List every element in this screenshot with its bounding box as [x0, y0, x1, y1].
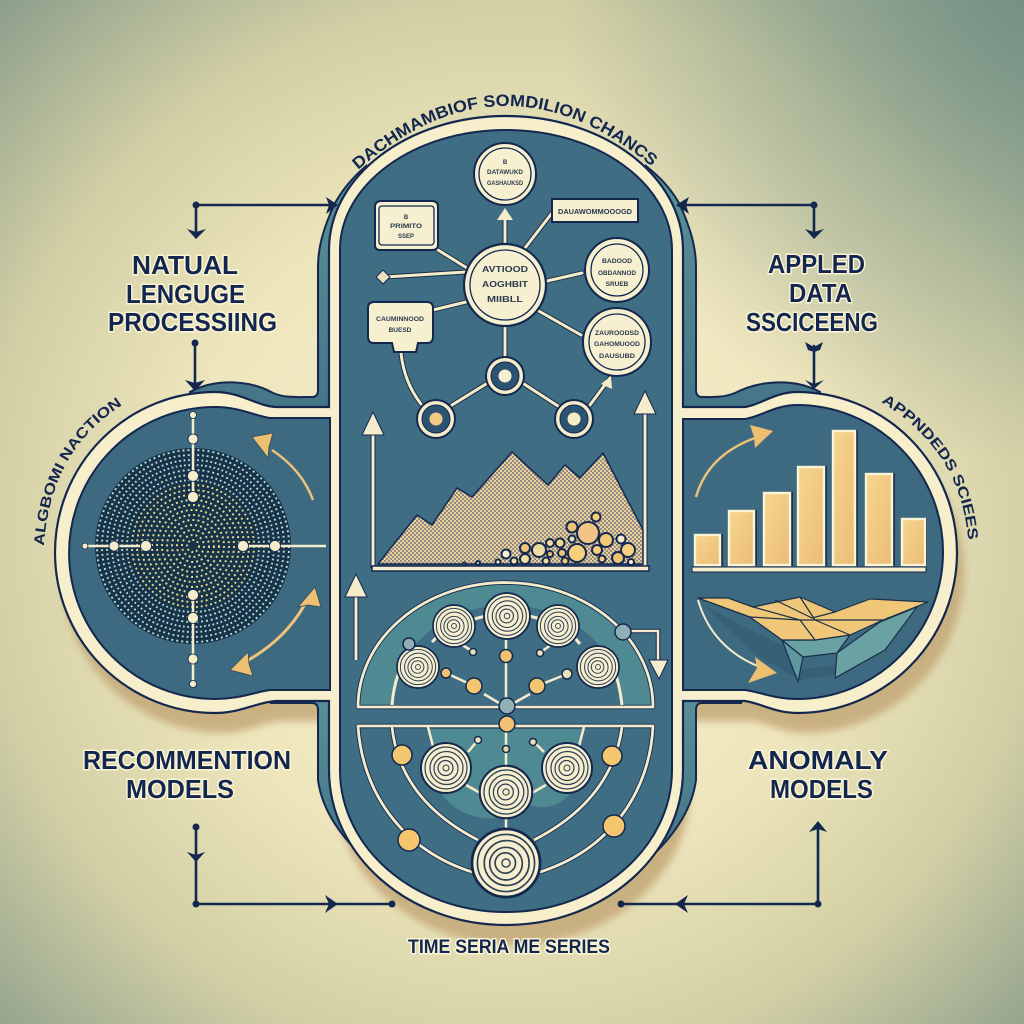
- label: applied data science: DATA: [789, 278, 852, 308]
- label: natural language processing: [108, 250, 277, 337]
- mountain area: [378, 452, 643, 564]
- bar chart: [692, 425, 927, 572]
- elbow arrow: [615, 624, 668, 679]
- node: top circle: GASHAUKSD: [487, 181, 524, 187]
- dome inner arch: [392, 605, 622, 705]
- node: top right label: [552, 199, 638, 222]
- node: right circle upper: OBDANNOD: [598, 270, 636, 277]
- panel: central column: [340, 130, 672, 912]
- gold nodes: [392, 716, 625, 851]
- node: top right label: DAUAWOMMOOOGD: [558, 207, 633, 216]
- node: left callout: CAUMINNOOD: [376, 316, 424, 323]
- upper semicircle network: [358, 583, 668, 714]
- arrowhead: to right circle: [601, 376, 612, 389]
- curved title: DACHMAMBIOF SOMDILION CHANCS: [352, 94, 657, 170]
- label: recommendation models: RECOMMENTION: [83, 745, 291, 775]
- crosshair nodes: [82, 412, 280, 688]
- chart axis: left arrow: [362, 412, 384, 568]
- node: diamond: [376, 270, 390, 284]
- lower bowl network: [358, 716, 653, 897]
- label: natural language processing: NATUAL: [132, 250, 238, 280]
- bowl outer: [358, 726, 653, 873]
- small nodes: [403, 638, 572, 714]
- node: central circle: [464, 244, 546, 326]
- panel: right circle: [683, 405, 943, 699]
- node: right circle upper: SRUEB: [606, 281, 629, 288]
- node: lower left: [417, 400, 455, 438]
- node: right circle lower: [583, 308, 651, 376]
- mountain area chart: [362, 391, 656, 571]
- label: anomaly models: ANOMALY: [748, 745, 888, 775]
- connector arrow: top left: [187, 197, 338, 239]
- node: right circle lower: DAUSUBD: [599, 353, 635, 360]
- teal outer bands: [190, 166, 820, 856]
- node: top left callout: B: [404, 215, 409, 221]
- node: lower middle: [486, 357, 524, 395]
- label: applied data science: [746, 249, 878, 337]
- crosshair lines: [85, 415, 326, 684]
- node: lower right: [555, 400, 593, 438]
- terrain surface: [698, 597, 928, 682]
- node: top circle: B: [503, 160, 508, 166]
- node: left callout: [368, 302, 433, 352]
- cross-shaped cream frame: [55, 116, 957, 925]
- node: central circle: AOGHBIT: [482, 279, 529, 289]
- label: anomaly models: MODELS: [770, 774, 873, 804]
- node links: [446, 640, 567, 703]
- bar shadows: [696, 430, 927, 566]
- gold arrow: upper left: [252, 433, 313, 500]
- node: central circle: MIIBLL: [487, 294, 523, 304]
- label: applied data science: APPLED: [768, 249, 865, 279]
- label: recommendation models: MODELS: [126, 774, 234, 804]
- node: left callout: BUESD: [389, 327, 412, 334]
- spiral node row: [397, 593, 619, 688]
- node: top circle: [474, 143, 536, 205]
- node: right circle lower: ZAUROODSD: [595, 330, 639, 337]
- connector arrow: bottom left: [187, 824, 396, 913]
- label: natural language processing: PROCESSIING: [108, 307, 277, 337]
- label: applied data science: SSCICEENG: [746, 307, 878, 337]
- bowl links: [428, 727, 584, 830]
- pebble cluster: [462, 512, 635, 566]
- connector arrow: applied down: [805, 342, 824, 389]
- node: top left callout: SSEP: [398, 234, 414, 240]
- drop shadow: [62, 136, 964, 945]
- label: anomaly models: [748, 745, 888, 804]
- gold arrow: terrain: [698, 600, 777, 683]
- connector arrow: top right: [676, 197, 824, 239]
- spiral nodes: [421, 743, 592, 897]
- connector arrow: bottom right: [618, 821, 827, 913]
- node: top circle: DATAWUKD: [487, 170, 524, 176]
- chart baseline: [372, 566, 649, 571]
- node: right circle lower: GAHOMUOOD: [594, 341, 640, 348]
- up arrow: [345, 574, 367, 660]
- bars: [695, 431, 925, 565]
- node: central circle: AVTIOOD: [482, 264, 528, 274]
- gold arrow: lower left double: [230, 587, 321, 676]
- dot sphere: [82, 412, 326, 688]
- arrowhead: to top circle: [497, 208, 513, 220]
- bowl tint: [430, 729, 582, 818]
- curved label: algorithm: ALGBOMI NACTION: [34, 397, 122, 546]
- dome: [358, 583, 653, 707]
- connector arrow: NLP down: [185, 340, 205, 391]
- node: right circle upper: [585, 238, 649, 302]
- node: top left callout: [375, 201, 438, 250]
- curved label: applied series: APPNDEDS SCIEES: [882, 396, 978, 539]
- label: recommendation models: [83, 745, 291, 804]
- panel: left circle: [69, 407, 330, 699]
- label: natural language processing: LENGUGE: [126, 279, 245, 309]
- chart axis: right arrow: [634, 391, 656, 568]
- bar chart baseline: [692, 567, 926, 572]
- bowl inner arc: [392, 727, 622, 840]
- node: top left callout: PRIMITO: [390, 224, 422, 230]
- node network diagram: [368, 143, 651, 438]
- label: time series: TIME SERIA ME SERIES: [408, 937, 610, 958]
- gold arrow: rising: [696, 425, 773, 497]
- node: right circle upper: BADOOD: [602, 258, 632, 265]
